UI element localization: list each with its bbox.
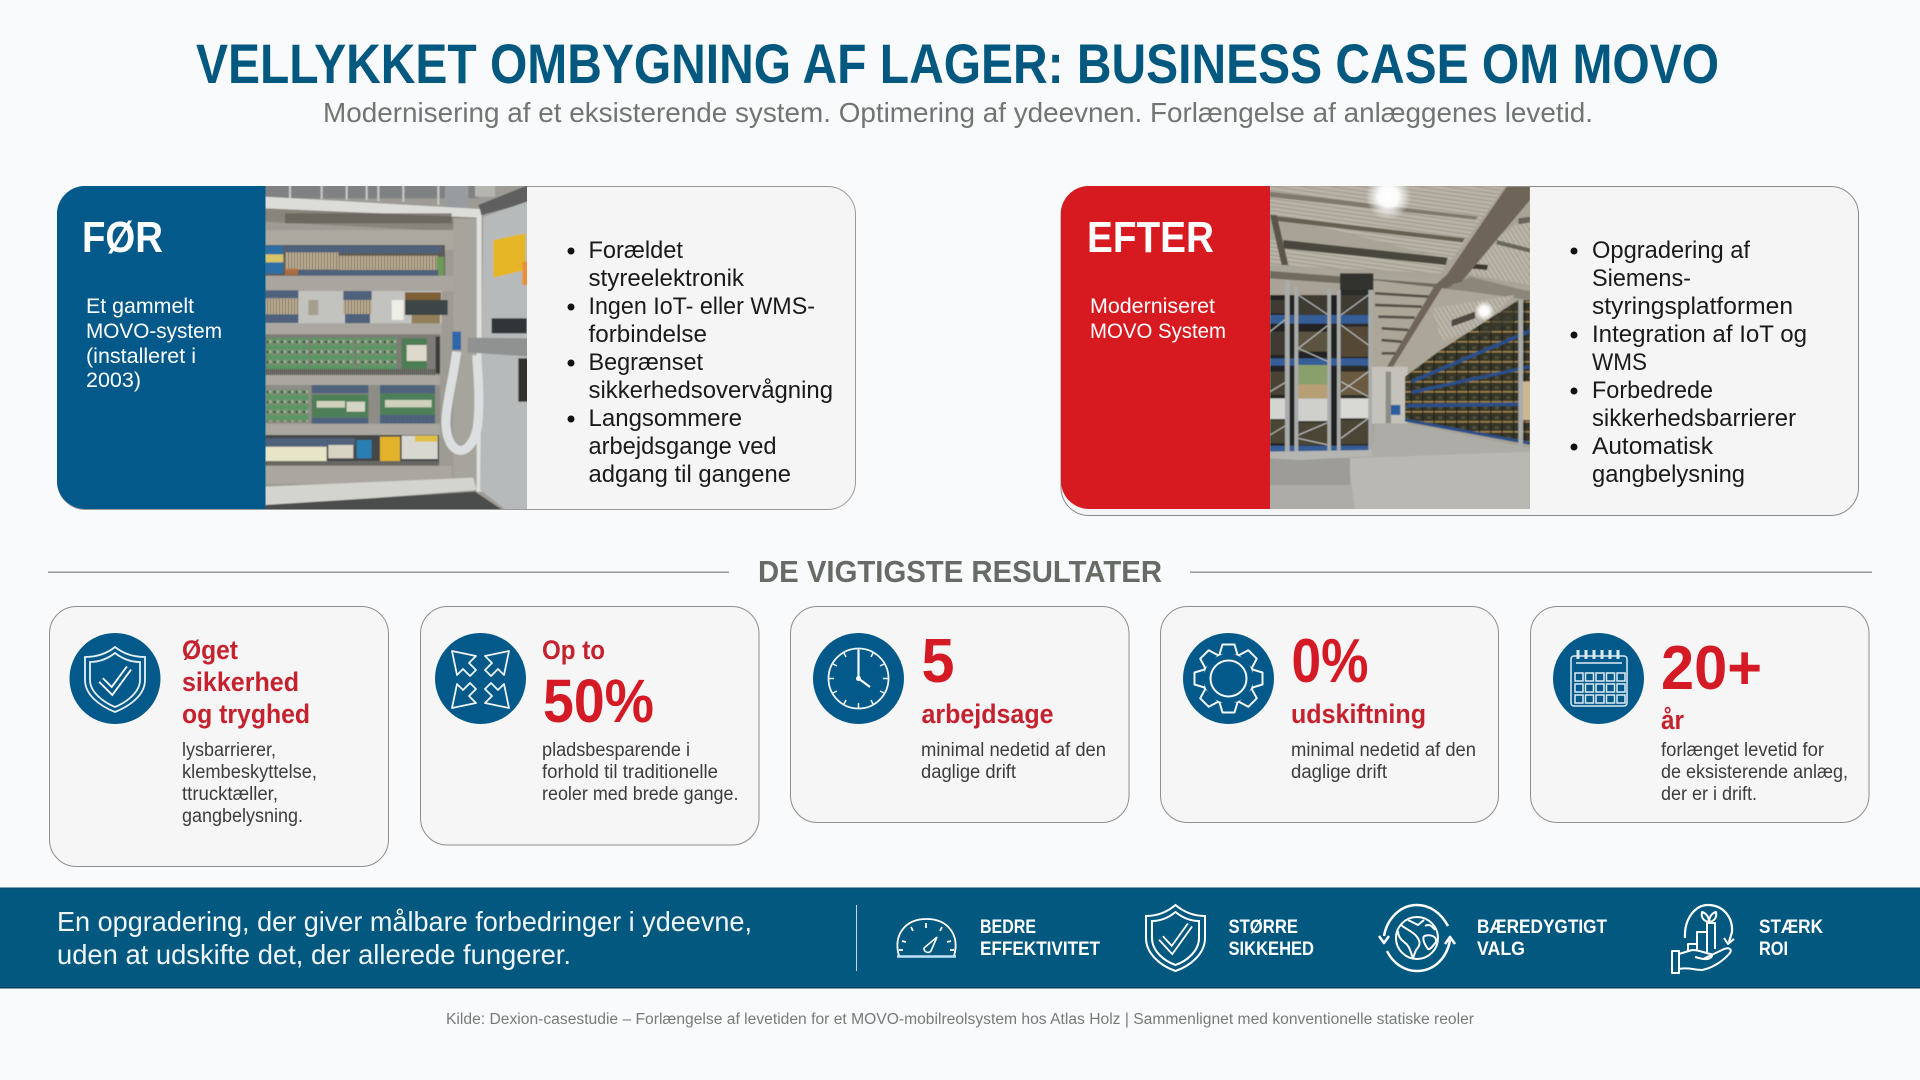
efter list: styringsplatformen — [1592, 293, 1793, 320]
card text: klembeskyttelse, — [182, 762, 317, 783]
photo: modernised warehouse — [1265, 174, 1532, 512]
label: roi: STÆRK — [1759, 917, 1823, 938]
card text — [542, 740, 738, 805]
big number: 20+ — [1661, 634, 1762, 703]
card heading: år — [1661, 705, 1684, 735]
panel: før — [57, 185, 856, 512]
panel: efter — [1061, 174, 1858, 515]
icon: clock — [813, 633, 904, 724]
label: bæredygtigt: VALG — [1477, 939, 1525, 960]
card: 5 arbejdsage — [790, 606, 1129, 822]
row 5 — [265, 435, 439, 465]
banner statement — [57, 906, 752, 970]
card text: forlænget levetid for — [1661, 740, 1825, 761]
subtitle: Modernisering af et eksisterende system. Optimering af ydeevnen. Forlængelse af anlæggenes levetid. — [323, 97, 1593, 128]
card text: minimal nedetid af den — [921, 740, 1106, 761]
card text: gangbelysning. — [182, 806, 303, 827]
row 3 — [265, 334, 440, 376]
label: bæredygtigt: BÆREDYGTIGT — [1477, 917, 1607, 938]
icon: growth in hand — [1672, 905, 1734, 973]
før list: forbindelse — [588, 321, 707, 348]
før list — [568, 237, 833, 488]
før description: 2003) — [86, 369, 141, 392]
efter list: Automatisk — [1592, 433, 1714, 460]
før list: Langsommere — [588, 405, 742, 432]
label: effektivitet: BEDRE — [980, 917, 1036, 938]
icon: compact arrows — [435, 633, 526, 724]
card text: pladsbesparende i — [542, 740, 690, 761]
icon: shield — [70, 633, 160, 724]
card text: forhold til traditionelle — [542, 762, 718, 783]
big number: 50% — [543, 667, 654, 735]
card text: der er i drift. — [1661, 784, 1757, 805]
før list: sikkerhedsovervågning — [588, 377, 833, 404]
row 1 — [265, 245, 445, 278]
card heading: og tryghed — [182, 699, 310, 729]
før description — [86, 295, 222, 392]
photo: old control cabinet — [265, 185, 532, 512]
card heading: udskiftning — [1291, 699, 1426, 729]
card: øget sikkerhed — [50, 606, 388, 866]
section heading: DE VIGTIGSTE RESULTATER — [758, 554, 1162, 589]
card text: daglige drift — [1291, 762, 1388, 783]
banner statement: En opgradering, der giver målbare forbedringer i ydeevne, — [57, 906, 752, 937]
efter list: Integration af IoT og — [1592, 321, 1807, 348]
card text — [1661, 740, 1848, 805]
efter colour block — [1061, 186, 1270, 509]
efter list: Forbedrede — [1592, 377, 1713, 404]
før list: Ingen IoT- eller WMS- — [588, 293, 815, 320]
card text — [1291, 740, 1476, 783]
label: roi: ROI — [1759, 939, 1788, 960]
card heading: Øget — [182, 635, 238, 665]
før list: styreelektronik — [588, 265, 745, 292]
efter description: MOVO System — [1090, 320, 1226, 343]
card heading — [182, 635, 310, 729]
før description: (installeret i — [86, 345, 196, 368]
label: sikkehed: STØRRE — [1228, 917, 1298, 938]
row 4 — [265, 385, 440, 424]
efter description: Moderniseret — [1090, 295, 1215, 318]
efter list: WMS — [1592, 349, 1647, 376]
card: 20+ år — [1530, 606, 1869, 822]
efter list: sikkerhedsbarrierer — [1592, 405, 1796, 432]
card text — [182, 740, 317, 827]
før list: Begrænset — [588, 349, 703, 376]
før colour block — [57, 186, 266, 509]
icon: globe — [1379, 905, 1455, 971]
icon: gauge — [897, 919, 956, 956]
card text: ttrucktæller, — [182, 784, 278, 805]
efter list: Siemens- — [1592, 265, 1691, 292]
banner — [0, 888, 1920, 988]
ceiling panels — [1270, 187, 1505, 260]
label: sikkehed: SIKKEHED — [1228, 939, 1314, 960]
før list: arbejdsgange ved — [588, 433, 776, 460]
før heading: FØR — [82, 213, 163, 262]
icon: shield — [1146, 905, 1205, 971]
door — [480, 200, 532, 512]
footer source: Kilde: Dexion-casestudie – Forlængelse af levetiden for et MOVO-mobilreolsystem hos Atlas Holz | Sammenlignet med konventionelle statiske reoler — [446, 1011, 1474, 1028]
card heading: arbejdsage — [922, 699, 1054, 729]
før list: adgang til gangene — [588, 461, 791, 488]
card: 50% — [420, 606, 759, 845]
efter list — [1570, 237, 1807, 488]
før list: Forældet — [588, 237, 683, 264]
card text: lysbarrierer, — [182, 740, 276, 761]
efter heading: EFTER — [1087, 213, 1214, 262]
main beam — [1385, 187, 1530, 372]
label: effektivitet: EFFEKTIVITET — [980, 939, 1100, 960]
label: roi — [1759, 917, 1823, 960]
card: 0% udskiftning — [1160, 606, 1498, 822]
right rack — [1405, 300, 1530, 442]
før description: MOVO-system — [86, 320, 222, 343]
icon: gear — [1183, 633, 1274, 724]
left racks — [1270, 294, 1338, 446]
card text — [921, 740, 1106, 783]
efter list: gangbelysning — [1592, 461, 1745, 488]
big number: 5 — [922, 627, 954, 696]
card heading: Op to — [542, 635, 605, 665]
card text: de eksisterende anlæg, — [1661, 762, 1848, 783]
efter list: Opgradering af — [1592, 237, 1750, 264]
label: bæredygtigt — [1477, 917, 1607, 960]
banner statement: uden at udskifte det, der allerede fungerer. — [57, 939, 571, 970]
row 2 — [265, 291, 442, 324]
card heading: sikkerhed — [182, 667, 299, 697]
label: sikkehed — [1228, 917, 1314, 960]
label: effektivitet — [980, 917, 1100, 960]
back wall — [1371, 367, 1408, 424]
card text: reoler med brede gange. — [542, 784, 738, 805]
card text: minimal nedetid af den — [1291, 740, 1476, 761]
card text: daglige drift — [921, 762, 1017, 783]
før description: Et gammelt — [86, 295, 194, 318]
icon: calendar — [1553, 633, 1644, 724]
big number: 0% — [1292, 627, 1368, 696]
efter description — [1090, 295, 1226, 343]
floor — [1270, 423, 1530, 512]
